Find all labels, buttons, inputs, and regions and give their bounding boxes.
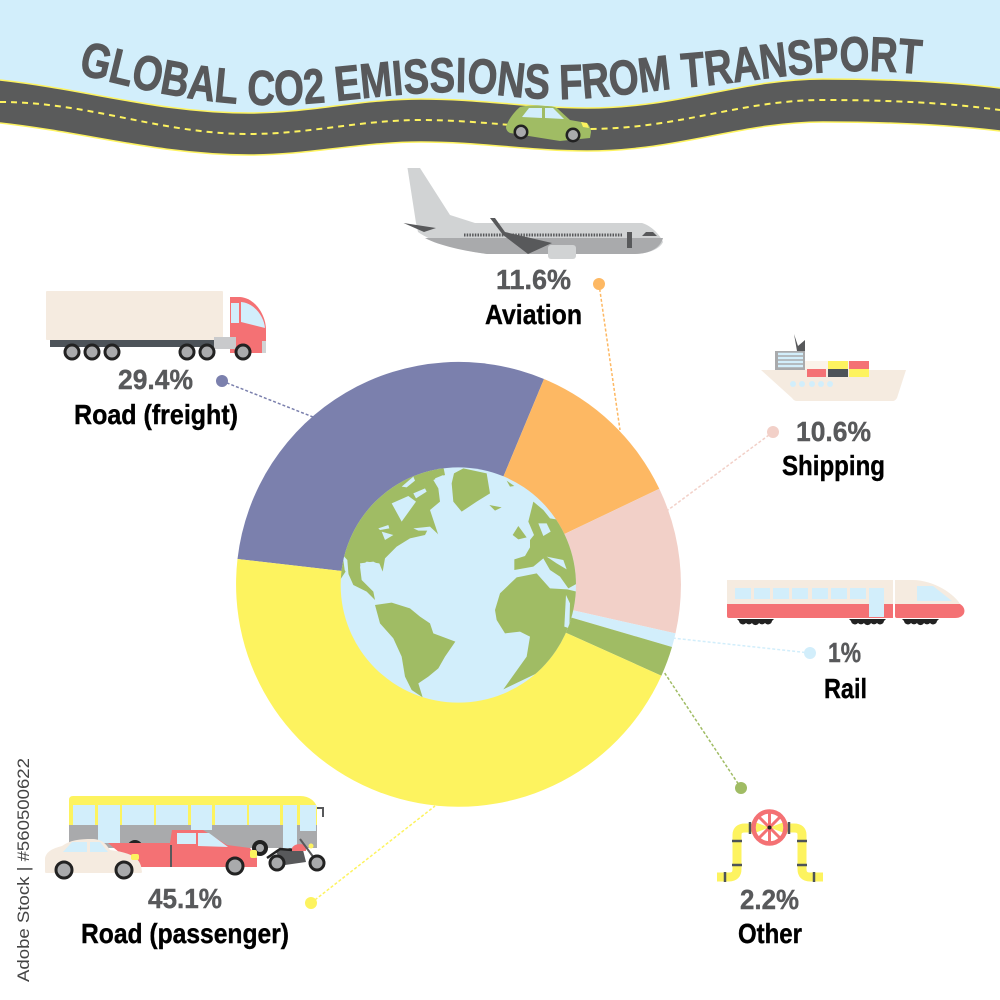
leader line: road freight <box>216 375 313 417</box>
stock credit: Adobe Stock | #560500622 <box>14 758 33 982</box>
leader line: other <box>664 672 747 794</box>
icon: truck <box>46 291 266 359</box>
label: rail: 1% <box>828 637 861 668</box>
leader line: aviation <box>593 278 620 430</box>
motorbike <box>267 839 324 870</box>
label: road freight: Road (freight) <box>74 399 238 430</box>
slice: rail 1% <box>458 584 676 647</box>
icon: train <box>727 580 964 625</box>
road <box>0 79 1000 155</box>
label: rail <box>824 637 867 704</box>
label: shipping: Shipping <box>782 450 885 481</box>
icon: pipeline valve <box>717 811 823 882</box>
label: shipping <box>782 416 885 481</box>
label: road passenger: 45.1% <box>148 883 222 914</box>
icon: road passenger vehicles <box>45 796 324 878</box>
slice: road freight 29.4% <box>238 362 544 584</box>
label: road passenger <box>81 883 289 949</box>
leader line: rail <box>672 638 816 659</box>
label: shipping: 10.6% <box>796 416 871 447</box>
label: road freight <box>74 364 238 430</box>
label: road freight: 29.4% <box>118 364 193 395</box>
label: other: Other <box>738 918 802 949</box>
label: aviation: Aviation <box>485 299 582 330</box>
bus <box>69 796 323 856</box>
slice: road passenger 45.1% <box>236 559 661 807</box>
title: GLOBAL CO2 EMISSIONS FROM TRANSPORT <box>82 36 924 106</box>
label: other <box>738 884 802 949</box>
label: aviation: 11.6% <box>496 264 571 295</box>
slice: other 2.2% <box>458 584 672 676</box>
leader line: road passenger <box>305 806 435 909</box>
icon: cargo ship <box>761 334 906 401</box>
donut chart <box>236 362 681 807</box>
small car <box>45 839 142 878</box>
pickup truck <box>108 830 257 874</box>
sky background <box>0 0 1000 113</box>
slice: shipping 10.6% <box>458 489 681 633</box>
icon: globe <box>330 460 583 703</box>
slice: aviation 11.6% <box>458 379 659 584</box>
label: other: 2.2% <box>740 884 799 915</box>
icon: green car <box>506 105 591 142</box>
label: rail: Rail <box>824 673 867 704</box>
leader line: shipping <box>668 426 779 510</box>
icon: airplane <box>404 168 663 259</box>
label: aviation <box>485 264 582 330</box>
label: road passenger: Road (passenger) <box>81 918 289 949</box>
